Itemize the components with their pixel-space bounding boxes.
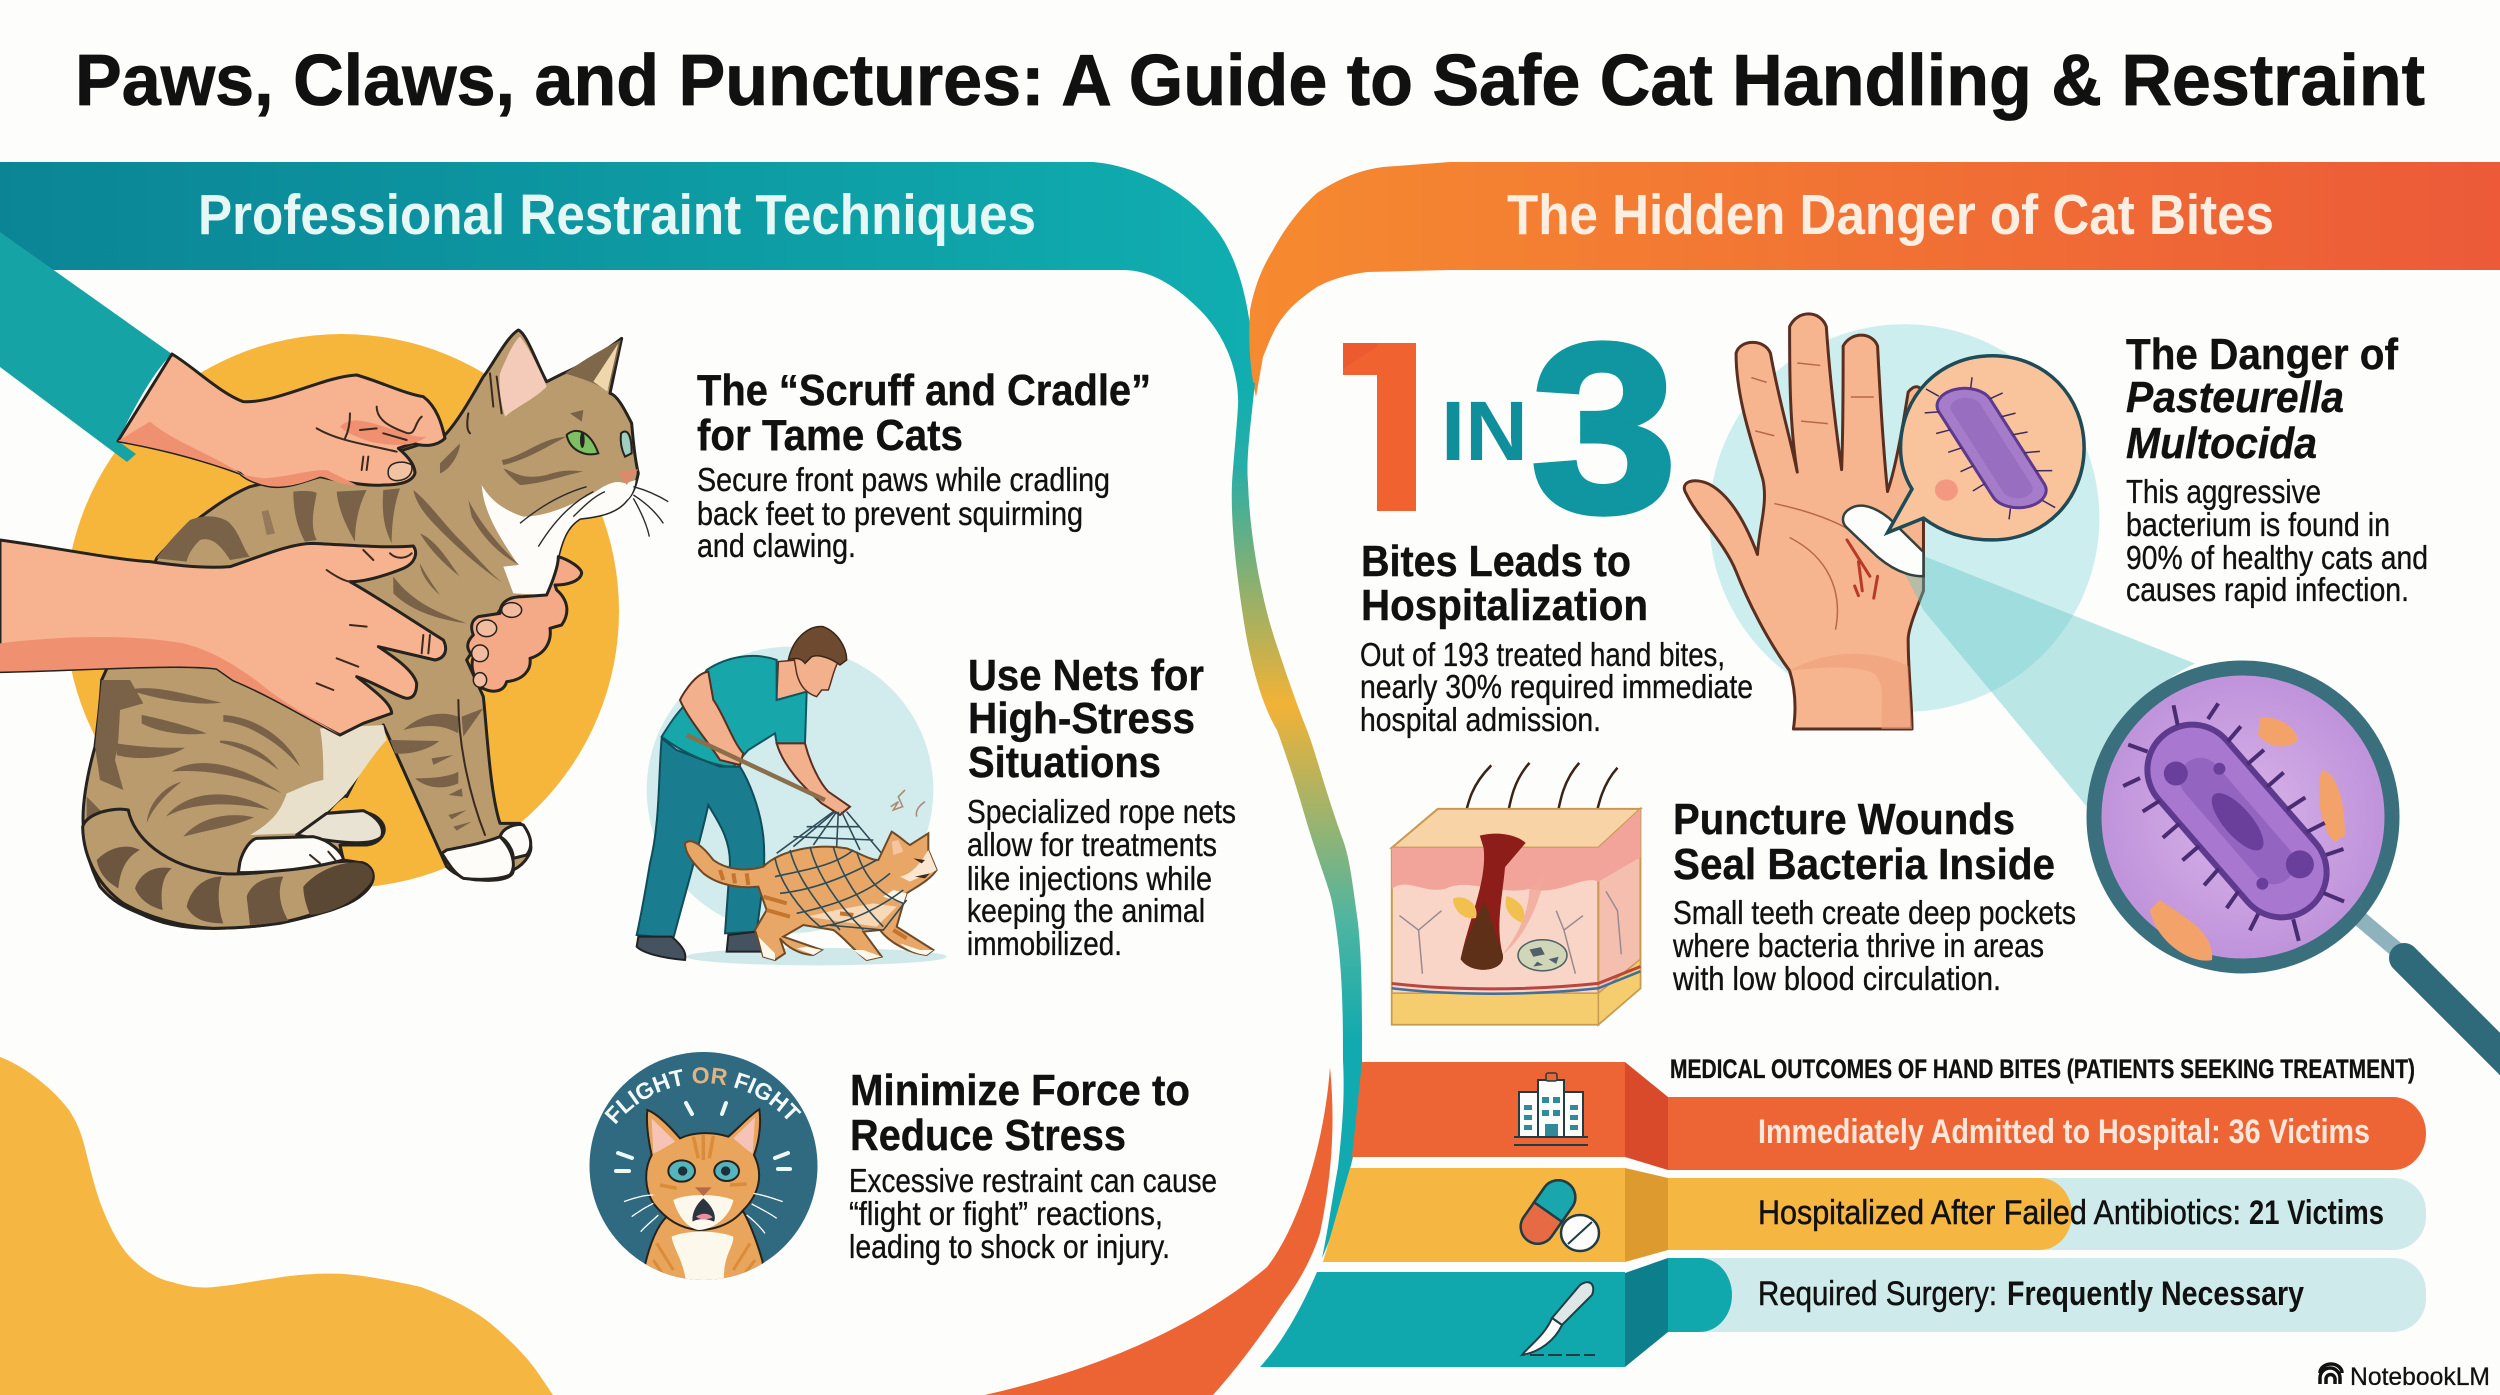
- text block: nets: [967, 651, 1236, 962]
- description: leading to shock or injury.: [849, 1228, 1170, 1265]
- redness spot: [1935, 479, 1958, 501]
- block front: [1392, 848, 1598, 1025]
- description: keeping the animal: [967, 892, 1205, 929]
- bleeding wound: [1847, 540, 1878, 598]
- panel: medical outcomes chart: [1260, 1054, 2426, 1367]
- badge cat: [624, 1109, 783, 1293]
- description: back feet to prevent squirming: [697, 495, 1083, 532]
- text block: puncture wounds: [1672, 795, 2076, 997]
- beam of light to magnifier: [1889, 542, 2195, 810]
- ground shadow: [687, 948, 947, 965]
- heading: Situations: [968, 738, 1161, 787]
- heading: [1673, 795, 2055, 889]
- face and hair: [788, 627, 847, 697]
- description: where bacteria thrive in areas: [1672, 927, 2044, 964]
- tail: [83, 809, 373, 928]
- illustration: skin cross-section: [1392, 763, 1640, 1025]
- description: Out of 193 treated hand bites,: [1360, 636, 1725, 673]
- pale circle backdrop: [1709, 324, 2099, 712]
- bar label: 21 Victims: [2249, 1194, 2384, 1232]
- heading: Seal Bacteria Inside: [1673, 840, 2055, 889]
- description: This aggressive: [2126, 473, 2321, 510]
- bottom-left yellow blob: [0, 1057, 553, 1395]
- leg stripes: [390, 708, 483, 831]
- illustration: bitten hand with callout: [1684, 314, 2195, 810]
- row: admitted to hospital: [1352, 1062, 2426, 1170]
- upper hand: [118, 354, 445, 487]
- callout bubble: [1888, 356, 2084, 540]
- bacteria colony: [1518, 940, 1567, 971]
- title: Paws, Claws, and Punctures: A Guide to Safe Cat Handling & Restraint: [75, 41, 2425, 121]
- block top: [1392, 809, 1640, 848]
- heading: Minimize Force to: [850, 1066, 1190, 1115]
- center dividing stripe: [1232, 377, 1362, 1258]
- hand: [1684, 314, 1923, 729]
- puncture wound: [1461, 834, 1526, 970]
- icon: hospital: [1514, 1073, 1588, 1145]
- text block: pasteurella: [2126, 330, 2428, 608]
- pale circle backdrop: [647, 647, 933, 933]
- description: [697, 461, 1110, 564]
- panel: left section header band: [0, 162, 1255, 400]
- big statistic: 1 in 3: [1343, 340, 1671, 517]
- third hand holding chest: [468, 557, 582, 691]
- block side: [1598, 809, 1640, 1025]
- description: [1360, 636, 1753, 738]
- bar label: Frequently Necessary: [2007, 1275, 2304, 1313]
- illustration: vet using a net on a cat: [637, 627, 947, 965]
- description: nearly 30% required immediate: [1360, 668, 1753, 705]
- description: bacterium is found in: [2126, 506, 2390, 543]
- lower body, tail and paws: [83, 680, 531, 928]
- handle: [2352, 912, 2500, 1064]
- eyes and nose: [567, 431, 638, 485]
- right ear: [565, 340, 621, 392]
- badge text: FLIGHT OR FIGHT: [604, 1067, 802, 1124]
- description: [1672, 894, 2076, 997]
- upper skin layer: [1392, 809, 1640, 891]
- heading: Puncture Wounds: [1673, 795, 2015, 844]
- heading: Multocida: [2126, 419, 2317, 468]
- description: immobilized.: [967, 925, 1122, 962]
- description: [967, 793, 1236, 962]
- description: Secure front paws while cradling: [697, 461, 1110, 498]
- orange cat: [685, 832, 937, 960]
- front paws: [500, 825, 531, 858]
- vessel bands: [1392, 966, 1640, 989]
- NotebookLM watermark: NotebookLM: [2350, 1363, 2490, 1391]
- bandage: [1843, 506, 1923, 576]
- heading: Hospitalization: [1361, 581, 1648, 630]
- big statistic: 1 in 3: IN: [1441, 384, 1528, 478]
- yellow circle behind cat: [65, 334, 619, 888]
- near hind paw: [238, 837, 343, 873]
- cream belly: [250, 725, 387, 835]
- net on cat body: [775, 847, 907, 930]
- arms: [680, 672, 850, 815]
- text block: bites leads to hospitalization: [1360, 537, 1753, 738]
- bacterium in callout: [1910, 373, 2073, 523]
- heading: Bites Leads to: [1361, 537, 1631, 586]
- heading: [1361, 537, 1648, 630]
- description: allow for treatments: [967, 826, 1217, 863]
- panel: right section header band: [1249, 162, 2500, 397]
- cat markings and paws: [720, 840, 937, 960]
- heading: [968, 651, 1204, 787]
- tail bands: [97, 847, 373, 925]
- upper body stripes: [157, 410, 583, 623]
- heading: left section: Professional Restraint Techniques: [198, 183, 1036, 247]
- heading: Pasteurella: [2126, 373, 2344, 422]
- description: Specialized rope nets: [967, 793, 1236, 830]
- far hind paw: [297, 811, 382, 843]
- heading: The Danger of: [2126, 330, 2398, 379]
- icon: scalpel: [1522, 1282, 1595, 1355]
- description: Small teeth create deep pockets: [1673, 894, 2076, 931]
- description: with low blood circulation.: [1672, 960, 2001, 997]
- description: 90% of healthy cats and: [2126, 539, 2428, 576]
- bar label: [1758, 1275, 2304, 1313]
- heading: Use Nets for: [968, 651, 1204, 700]
- orange bottom swoosh: [985, 1067, 1333, 1395]
- row: failed antibiotics: [1323, 1168, 2426, 1262]
- text block: minimize force: [849, 1066, 1217, 1265]
- heading: The “Scruff and Cradle”: [697, 366, 1151, 415]
- bar label: Hospitalized After Failed Antibiotics:: [1758, 1194, 2241, 1232]
- row: required surgery: [1260, 1258, 2426, 1367]
- big statistic: 1 in 3: 1: [1326, 294, 1459, 562]
- icon: pills: [1514, 1174, 1599, 1251]
- description: [849, 1162, 1217, 1265]
- trousers: [637, 738, 764, 938]
- heading: right section: The Hidden Danger of Cat Bites: [1507, 183, 2274, 247]
- heading: [850, 1066, 1190, 1160]
- illustration: cat held by two hands: [0, 232, 668, 928]
- heading: [697, 366, 1151, 460]
- palm creases: [1751, 363, 1874, 630]
- text block: scruff and cradle: [697, 366, 1151, 564]
- description: Excessive restraint can cause: [849, 1162, 1217, 1199]
- lower arm and hand: [0, 540, 446, 735]
- heading: Reduce Stress: [850, 1111, 1126, 1160]
- icon: flight or fight badge: [590, 1052, 818, 1280]
- vessels: [1399, 891, 1621, 974]
- cat body: [83, 330, 638, 928]
- bar label: Required Surgery:: [1758, 1275, 1997, 1313]
- description: [2126, 473, 2428, 608]
- stress marks: [891, 790, 925, 817]
- sleeve: [0, 232, 172, 462]
- heading: High-Stress: [968, 694, 1195, 743]
- white chest and muzzle: [482, 480, 636, 595]
- orange spots: [2150, 717, 2345, 961]
- heading: for Tame Cats: [697, 411, 963, 460]
- hairs: [1462, 763, 1617, 828]
- description: like injections while: [967, 860, 1212, 897]
- wrist shading: [1790, 654, 1912, 729]
- cat and hands: [0, 330, 668, 928]
- description: causes rapid infection.: [2126, 571, 2409, 608]
- fat layer: [1392, 959, 1640, 1025]
- description: “flight or fight” reactions,: [849, 1195, 1163, 1232]
- neck: [777, 660, 807, 700]
- net over cat: [777, 812, 882, 853]
- bacterium: [2102, 680, 2374, 964]
- big statistic: 1 in 3: 3: [1531, 294, 1677, 562]
- description: and clawing.: [697, 527, 856, 564]
- flank stripes: [87, 680, 300, 837]
- left ear: [499, 337, 547, 417]
- illustration: magnifying glass with bacterium: [2094, 668, 2500, 1064]
- heading: [2126, 330, 2398, 468]
- stress marks: [616, 1103, 790, 1171]
- bar label: Immediately Admitted to Hospital: 36 Victims: [1758, 1113, 2370, 1151]
- shirt: [662, 656, 807, 767]
- lens: [2094, 668, 2392, 966]
- shoes: [637, 932, 763, 960]
- whiskers: [520, 487, 668, 547]
- glands: [1453, 896, 1524, 923]
- net pole: [687, 735, 825, 800]
- description: hospital admission.: [1360, 701, 1601, 738]
